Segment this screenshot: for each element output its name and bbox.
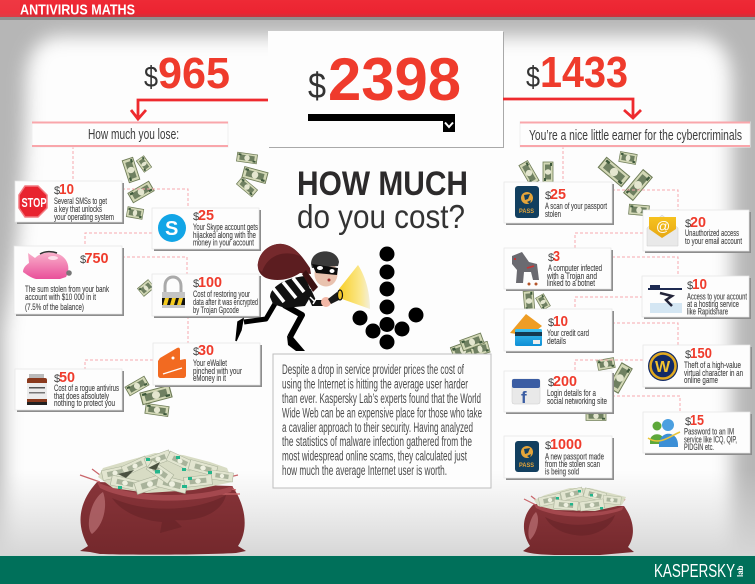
card: new passport: from the stolen scan [545,459,600,470]
card: stop: 10 [59,181,74,198]
heading: how much you lose: How much you lose: [88,126,179,143]
card: padlock: data after it was encrypted [193,297,258,308]
icon: dotted down arrow [352,246,424,350]
card: skype: 25 [198,207,214,224]
total panel [268,31,504,148]
total panel: $ [308,65,326,106]
header bar: ANTIVIRUS MATHS [20,2,135,18]
card: ewallet: Your eWallet [193,358,227,369]
card: credit card: details [547,336,566,347]
icon: stop sign: STOP [22,196,46,210]
loot sack [258,244,311,280]
icon: trojan horse [512,252,539,286]
icon: envelope: @ [656,218,670,234]
icon: passport: PASS [519,463,534,469]
falling money bills [122,152,652,420]
card: piggy bank: (7.5% of the balance) [25,302,84,313]
amount: 965 with arrow: 965 [158,49,230,98]
icon: piggy bank [23,252,72,279]
card: rogue antivirus: that does absolutely [54,391,109,402]
card: piggy bank [14,246,124,316]
card: new passport: is being sold [545,466,579,478]
illustration: left money bag [80,450,246,555]
card: ewallet: $ [193,346,199,358]
card: stop: Several SMSs to get [54,196,107,207]
card: trojan: 3 [553,248,560,265]
card: social network [504,371,614,414]
card: new passport: $ [545,440,551,452]
card: social network: $ [548,377,554,389]
card: social network: social networking site [547,396,607,407]
text panel: a cavalier approach to their security. Having analyzed [282,420,473,435]
card: email [643,210,751,253]
card: padlock: $ [193,278,199,290]
card: piggy bank: 750 [84,250,108,267]
card: new passport [504,436,614,480]
head [314,262,338,286]
icon: facebook calendar: f [521,388,527,407]
card: stop: a key that unlocks [54,204,102,215]
icon: messenger people [648,419,680,447]
text panel: how much the average Internet user is worth. [282,463,447,478]
card: game character: online game [684,375,718,386]
text panel: than ever. Kaspersky Lab’s experts found that the World [282,391,481,406]
card: trojan: linked to a botnet [547,278,595,289]
amount: 1433 with arrow: $ [526,61,540,94]
heading: nice little earner [520,122,750,147]
icon: credit cards [510,314,542,346]
card: padlock: Cost of restoring your [193,289,250,300]
card: instant messenger: PIDGIN etc. [684,442,714,453]
card: stop: $ [54,185,60,197]
card: ewallet: 30 [198,342,214,359]
footer bar: lab [736,565,745,577]
amount: 1433 with arrow: 1433 [540,48,628,97]
card: instant messenger [643,412,752,455]
card: rogue antivirus: $ [54,373,60,385]
card: rapidshare: like Rapidshare [687,306,728,318]
card: skype: $ [193,211,199,223]
card: game character: 150 [690,345,712,362]
card: skype: money in your account [193,238,254,248]
icon: padlock [162,277,185,308]
text panel: using the Internet is hitting the average user harder [282,376,468,392]
icon: passport: PASS [519,209,534,215]
card: social network: 200 [553,373,577,390]
card: piggy bank: The sum stolen from your bank [25,284,109,295]
icon: hosting service [648,285,682,313]
total panel: 2398 [328,46,461,113]
card: rogue antivirus: Cost of a rogue antivirus [54,383,119,394]
title [297,165,468,235]
card: game character [643,345,752,389]
amount: 965 with arrow [131,49,268,119]
card: new passport: A new passport made [545,452,604,462]
stack of cash [450,333,490,360]
card: ewallet: pinched with your [193,366,242,377]
card: passport scan: stolen [545,209,561,220]
card: padlock [152,274,261,318]
card: rogue antivirus: 50 [59,369,75,386]
text panel [273,354,491,488]
card: trojan: $ [548,252,554,264]
card: piggy bank: $ [80,254,86,266]
card: credit card: 10 [553,313,568,330]
card: credit card: $ [548,317,554,329]
card: ewallet [153,342,262,387]
card: stop: your operating system [54,212,114,223]
card: rapidshare [642,276,751,319]
amount: 1433 with arrow [503,48,641,118]
card: credit card: Your credit card [547,328,589,339]
card: skype [152,207,261,251]
card: email: $ [685,218,691,230]
pile of banknotes [98,450,234,494]
dashed connectors [73,146,680,412]
card: instant messenger: $ [685,416,691,428]
card: credit card [504,309,614,353]
card: passport scan: $ [545,190,551,202]
text panel: most widespread online scams, they calculated just [282,448,467,464]
illustration: thief with flashlight [236,244,370,351]
card: passport scan [504,182,614,225]
card: new passport: 1000 [550,436,582,453]
icon: skype: S [165,218,178,240]
illustration: right money bag [523,487,634,555]
legs [244,302,276,322]
card: skype: Your Skype account gets [193,222,258,233]
card: instant messenger: 15 [690,412,704,429]
card: email: 20 [690,214,706,231]
header bar [0,0,755,18]
card: social network: Login details for a [547,388,596,399]
flashlight beam [339,265,370,309]
card: passport scan: A scan of your passport [545,201,607,212]
arm [308,290,325,303]
hand and flashlight [321,297,331,307]
icon: pill bottle [27,374,47,405]
card: trojan: A computer infected [548,263,602,274]
icon: orange wallet [158,348,186,378]
title: HOW MUCH [297,165,468,203]
heading: how much you lose [32,122,228,147]
footer bar [0,555,755,584]
card: piggy bank: account with $10 000 in it [25,292,96,303]
card: skype: hijacked along with the [193,230,256,241]
card: rapidshare: 10 [692,276,707,293]
card: rapidshare: $ [687,280,693,292]
text panel: the statistics of malware infection gathered from the [282,434,472,449]
icon: game emblem: W [655,359,671,376]
card: padlock: by Trojan Gpcode [193,305,239,316]
card: rogue antivirus: nothing to protect you [54,398,115,409]
striped torso [270,276,312,308]
amount: 965 with arrow: $ [144,61,158,94]
card: ewallet: eMoney in it [193,373,226,384]
card: padlock: 100 [198,274,222,291]
card: trojan: with a Trojan and [546,271,597,282]
card: rogue antivirus [15,369,124,412]
card: stop [15,181,124,224]
text panel: Despite a drop in service provider prices the cost of [282,362,464,377]
card: passport scan: 25 [550,186,566,203]
title: do you cost? [297,198,465,235]
text panel: Wide Web can be an expensive place for those who take [282,406,482,420]
pile of banknotes [534,487,626,511]
card: trojan [504,248,613,291]
card: game character: $ [685,349,691,361]
